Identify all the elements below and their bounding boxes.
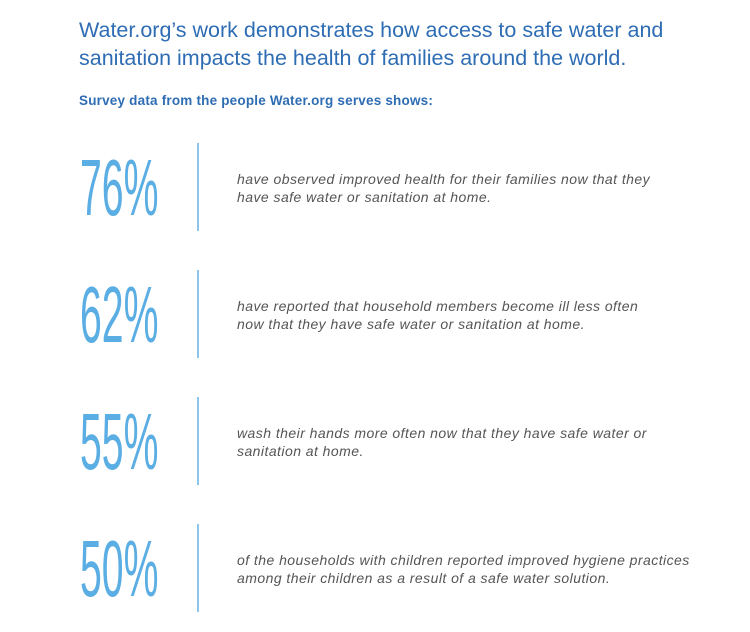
stat row 55%: 55% [80, 397, 158, 486]
stat row 62% [80, 270, 638, 359]
stat row 50%: 50% [80, 524, 158, 613]
stat row 55%: wash their hands more often now that they have safe water or [237, 425, 647, 441]
stat row 50%: of the households with children reported improved hygiene practices [237, 552, 690, 568]
title: Water.org’s work demonstrates how access to safe water and sanitation impacts the health of families around the world. [79, 18, 663, 70]
stat row 62%: now that they have safe water or sanitation at home. [237, 316, 585, 332]
stat row 76% [80, 143, 650, 232]
stat row 50%: among their children as a result of a safe water solution. [237, 570, 610, 586]
stat row 62%: have reported that household members become ill less often [237, 298, 638, 314]
stat row 55% [80, 397, 647, 486]
stat row 55%: sanitation at home. [237, 443, 364, 459]
subtitle: Survey data from the people Water.org serves shows: [79, 93, 433, 108]
stat row 50% [80, 524, 690, 613]
stat row 62%: 62% [80, 270, 158, 359]
stat row 76%: have safe water or sanitation at home. [237, 189, 491, 205]
stat row 76%: 76% [80, 143, 158, 232]
stat row 76%: have observed improved health for their families now that they [237, 171, 650, 187]
